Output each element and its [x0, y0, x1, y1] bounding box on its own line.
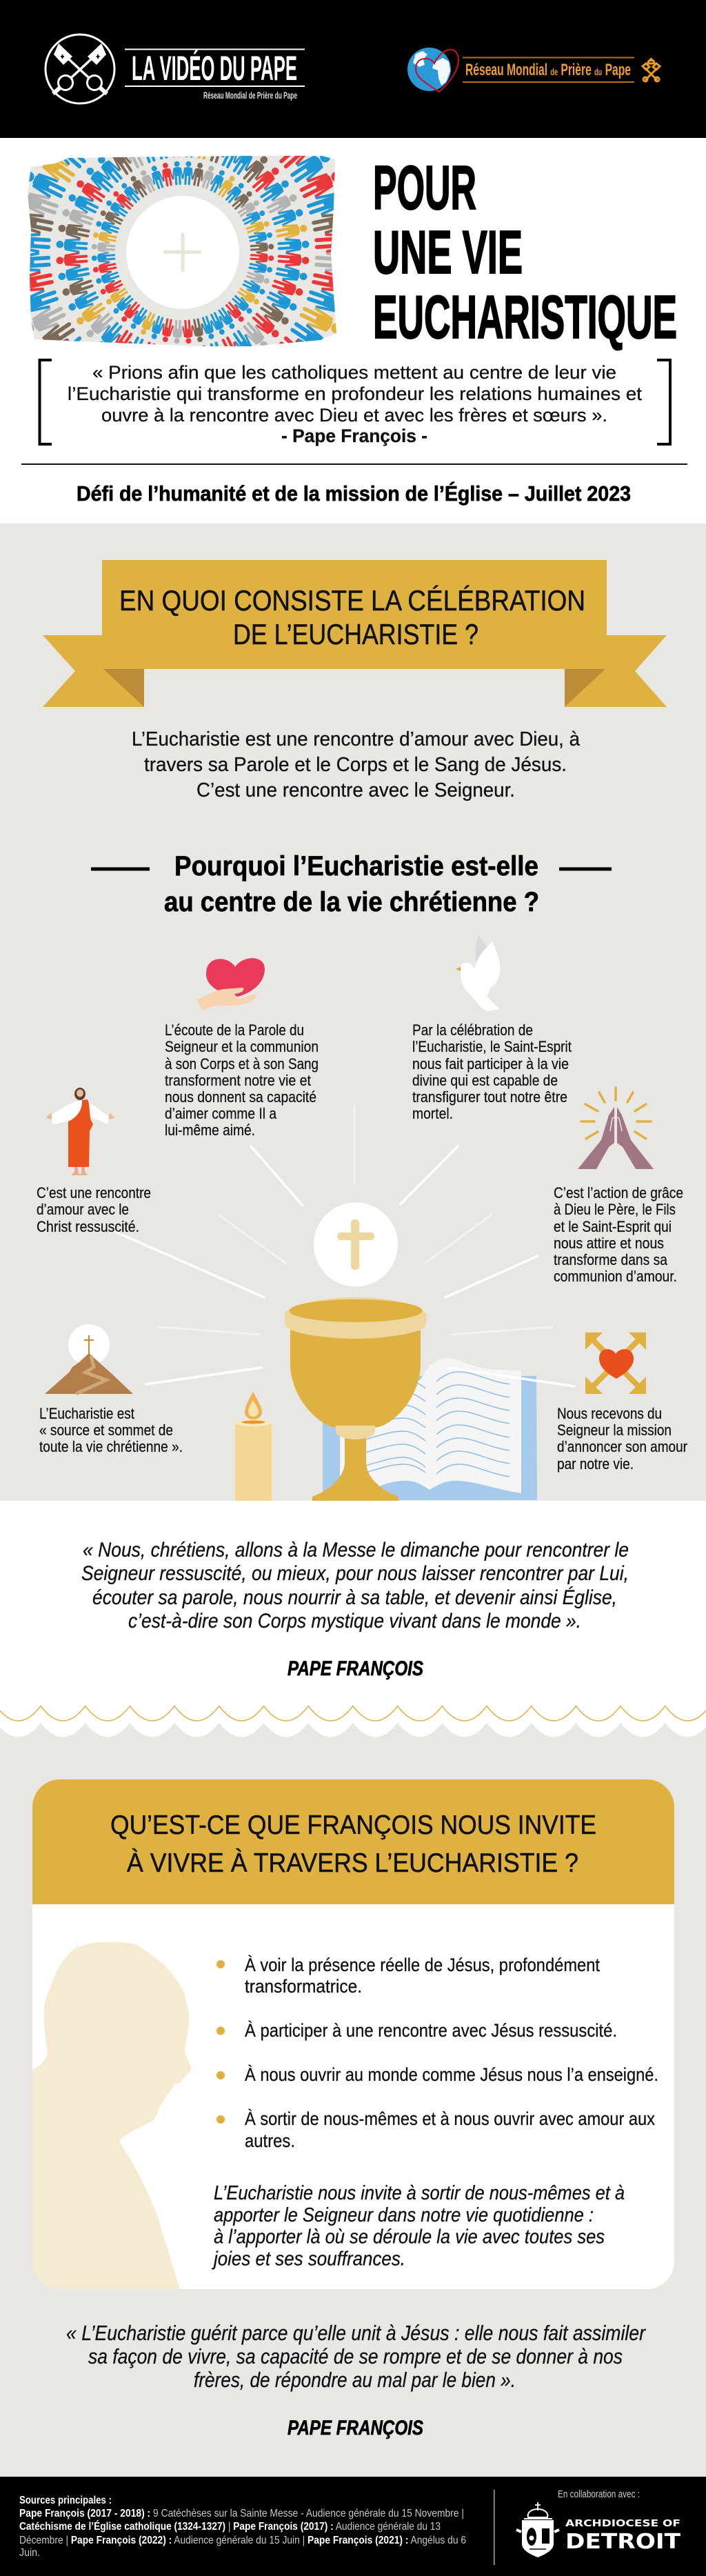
text: Holy Spirit: transfigurer tout notre être — [412, 1088, 567, 1106]
text: mission: Seigneur la mission — [557, 1421, 672, 1439]
text: Holy Spirit: l’Eucharistie, le Saint-Esprit — [412, 1038, 572, 1055]
quote: Eucharist heals: PAPE FRANÇOIS — [288, 2417, 423, 2439]
italic conclusion: à l’apporter là où se déroule la vie avec toutes ses — [214, 2226, 605, 2248]
card heading — [110, 1810, 596, 1878]
divider — [21, 463, 687, 465]
sources: Décembre | Pape François (2022) : Audience générale du 15 Juin | Pape François (2021) : Angélus du 6 — [19, 2535, 466, 2546]
logo text: Archdiocese of Detroit: DETROIT — [565, 2530, 681, 2554]
illustration: host with cross — [314, 1203, 398, 1287]
title: UNE VIE — [373, 218, 523, 286]
sources: Juin. — [19, 2547, 40, 2559]
text: source and summit: « source et sommet de — [39, 1421, 173, 1439]
text: Holy Spirit: divine qui est capable de — [412, 1072, 558, 1089]
text: listening to the Word — [165, 1021, 319, 1139]
intro paragraph: travers sa Parole et le Corps et le Sang de Jésus. — [144, 754, 567, 776]
illustration: open book — [323, 1358, 537, 1501]
text: listening to the Word: nous donnent sa capacité — [165, 1088, 316, 1106]
italic conclusion: joies et ses souffrances. — [211, 2248, 405, 2270]
bullet list: À voir la présence réelle de Jésus, profondément — [245, 1955, 600, 1975]
intro paragraph — [132, 728, 581, 801]
card heading: QU’EST-CE QUE FRANÇOIS NOUS INVITE — [110, 1810, 596, 1840]
section heading: Pourquoi l'Eucharistie: au centre de la vie chrétienne ? — [164, 887, 539, 917]
logo text: Réseau Mondial de Prière du Pape: Réseau Mondial de Prière du Pape — [465, 61, 631, 79]
text: mission: Nous recevons du — [557, 1405, 662, 1422]
text: Holy Spirit: nous fait participer à la vie — [412, 1055, 569, 1072]
icon: small gold keys — [643, 58, 660, 81]
italic conclusion: L’Eucharistie nous invite à sortir de nous-mêmes et à — [214, 2182, 625, 2204]
ribbon banner heading: EN QUOI CONSISTE LA CÉLÉBRATION — [119, 584, 585, 617]
bullet list: À sortir de nous-mêmes et à nous ouvrir avec amour aux — [245, 2108, 655, 2129]
scallop divider — [0, 1706, 706, 2477]
quote: Eucharist heals — [66, 2321, 646, 2439]
ribbon banner heading: DE L’EUCHARISTIE ? — [233, 618, 478, 650]
collaboration label: En collaboration avec : — [558, 2488, 640, 2500]
quote: Pope Francis on Sunday Mass: Seigneur ressuscité, ou mieux, pour nous laisser rencontrer par Lui, — [81, 1562, 629, 1585]
card heading: À VIVRE À TRAVERS L’EUCHARISTIE ? — [127, 1848, 578, 1878]
light rays — [115, 1106, 574, 1386]
prayer intention quote: ouvre à la rencontre avec Dieu et avec les frères et sœurs ». — [101, 405, 607, 426]
logo title: La Vidéo du Pape — [125, 49, 305, 101]
text: mission: par notre vie. — [557, 1455, 634, 1472]
logo title: La Vidéo du Pape: LA VIDÉO DU PAPE — [132, 49, 297, 88]
illustration: circle of people — [28, 156, 336, 346]
section heading: Pourquoi l'Eucharistie: Pourquoi l’Eucharistie est-elle — [174, 851, 538, 881]
text: listening to the Word: transforment notre vie et — [165, 1072, 311, 1089]
section heading: Pourquoi l'Eucharistie — [91, 851, 612, 917]
title — [373, 154, 677, 351]
white band under grey section — [0, 1501, 706, 1723]
italic conclusion: apporter le Seigneur dans notre vie quotidienne : — [214, 2204, 594, 2226]
sources: Pape François (2017 - 2018) : 9 Catéchèses sur la Sainte Messe - Audience générale du 15 Novembre | — [19, 2508, 464, 2519]
intro paragraph: C’est une rencontre avec le Seigneur. — [196, 779, 515, 801]
bullet list: À nous ouvrir au monde comme Jésus nous l’a enseigné. — [245, 2064, 658, 2085]
logo: La Vidéo du Pape keys — [46, 34, 114, 103]
text: listening to the Word: à son Corps et à son Sang — [165, 1055, 319, 1072]
bullet list — [216, 1955, 658, 2151]
illustration: chalice — [284, 1297, 427, 1501]
panel: grey section background — [0, 523, 706, 1501]
text: thanksgiving: et le Saint-Esprit qui — [554, 1218, 672, 1235]
quote: Pope Francis on Sunday Mass: c’est-à-dire son Corps mystique vivant dans le monde ». — [128, 1610, 581, 1633]
text: Holy Spirit: Par la célébration de — [412, 1021, 533, 1039]
text: thanksgiving: à Dieu le Père, le Fils — [554, 1201, 676, 1218]
prayer intention quote: « Prions afin que les catholiques mettent au centre de leur vie — [92, 362, 616, 383]
quote: Eucharist heals: sa façon de vivre, sa capacité de se rompre et de se donner à nos — [88, 2344, 623, 2368]
logo: Réseau Mondial globe and heart — [407, 48, 458, 92]
prayer intention quote: - Pape François - — [281, 426, 427, 446]
quote: Pope Francis on Sunday Mass: PAPE FRANÇOIS — [288, 1657, 423, 1680]
text: thanksgiving: transforme dans sa — [554, 1251, 668, 1268]
text: mission: d’annoncer son amour — [557, 1438, 687, 1455]
text: source and summit: toute la vie chrétienne ». — [39, 1438, 183, 1455]
italic conclusion — [211, 2182, 625, 2270]
text: meeting of love with risen Christ: C’est une rencontre — [37, 1184, 151, 1201]
icon: risen Christ — [46, 1088, 114, 1175]
quote: Pope Francis on Sunday Mass — [81, 1539, 629, 1680]
quote: Eucharist heals: frères, de répondre au mal par le bien ». — [194, 2368, 516, 2392]
bullet list: autres. — [245, 2130, 295, 2151]
text: mission — [557, 1405, 687, 1472]
subtitle: monthly challenge: Défi de l’humanité et de la mission de l’Église – Juillet 2023 — [77, 481, 631, 506]
icon: dove — [456, 936, 500, 1011]
text: Holy Spirit: mortel. — [412, 1105, 453, 1122]
ribbon banner heading — [43, 560, 667, 707]
intro paragraph: L’Eucharistie est une rencontre d’amour avec Dieu, à — [132, 728, 581, 750]
text: listening to the Word: d’aimer comme Il a — [165, 1105, 277, 1122]
card header — [32, 1779, 674, 1904]
sources: Sources principales : — [19, 2495, 112, 2506]
text: thanksgiving: nous attire et nous — [554, 1235, 664, 1252]
text: listening to the Word: L’écoute de la Parole du — [165, 1021, 304, 1039]
prayer intention quote: l’Eucharistie qui transforme en profondeur les relations humaines et — [68, 383, 643, 404]
header band — [0, 0, 706, 138]
logo text: Archdiocese of Detroit — [565, 2519, 681, 2554]
footer — [0, 2477, 706, 2576]
bullet list: transformatrice. — [245, 1976, 362, 1997]
quote: Pope Francis on Sunday Mass: écouter sa parole, nous nourrir à sa table, et devenir ainsi Église, — [92, 1586, 617, 1609]
text: listening to the Word: lui-même aimé. — [165, 1121, 255, 1139]
bullet list: À participer à une rencontre avec Jésus ressuscité. — [245, 2020, 617, 2041]
quote: Pope Francis on Sunday Mass: « Nous, chrétiens, allons à la Messe le dimanche pour rencontrer le — [83, 1539, 629, 1561]
text: meeting of love with risen Christ: Christ ressuscité. — [37, 1218, 139, 1235]
logo text: Archdiocese of Detroit: ARCHDIOCESE OF — [565, 2519, 680, 2529]
sources: Catéchisme de l’Église catholique (1324-1327) | Pape François (2017) : Audience générale du 13 — [19, 2519, 441, 2533]
icon: mountain with cross and halo — [45, 1324, 133, 1394]
logo title: La Vidéo du Pape: Réseau Mondial de Prière du Pape — [203, 90, 297, 101]
panel: invitation card — [32, 1779, 674, 2289]
text: meeting of love with risen Christ: d’amour avec le — [37, 1201, 129, 1218]
title: POUR — [373, 154, 476, 223]
silhouette: Pope profile — [32, 1937, 192, 2289]
sources — [19, 2495, 466, 2559]
icon: heart with four arrows — [585, 1332, 646, 1394]
text: listening to the Word: Seigneur et la communion — [165, 1038, 319, 1055]
icon: praying hands with rays — [578, 1088, 654, 1169]
text: source and summit — [39, 1405, 183, 1455]
prayer intention quote — [40, 360, 670, 446]
text: meeting of love with risen Christ — [37, 1184, 151, 1235]
text: thanksgiving: C’est l’action de grâce — [554, 1184, 683, 1201]
illustration: candle — [235, 1392, 272, 1501]
text: thanksgiving — [554, 1184, 683, 1285]
text: Holy Spirit — [412, 1021, 572, 1122]
logo: Archdiocese of Detroit crest — [516, 2502, 559, 2557]
icon: heart in hand — [197, 958, 265, 1011]
text: thanksgiving: communion d’amour. — [554, 1268, 677, 1285]
text: source and summit: L’Eucharistie est — [39, 1405, 134, 1422]
